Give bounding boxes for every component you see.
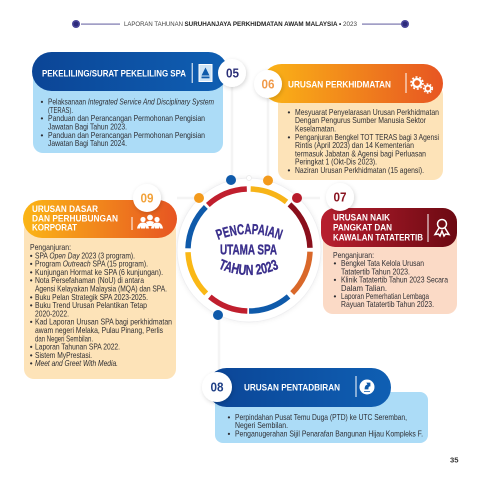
page header: [72, 20, 409, 28]
text block: 07: Bengkel Tata Kelola Urusan: [341, 259, 424, 268]
text block: 06: •: [288, 133, 290, 142]
text block: 06: Keselamatan.: [295, 124, 336, 134]
badge: 09: [133, 184, 161, 212]
icon: award ribbon: [435, 220, 449, 236]
text block: 09: •: [30, 251, 33, 260]
badge: 08: 08: [210, 380, 224, 394]
panel: 06 urusan perkhidmatan: [254, 64, 443, 180]
text block: 09: Kad Laporan Urusan SPA bagi perkhidmatan: [35, 318, 172, 327]
text block: 09: Nota Persefahaman (NoU) di antara: [35, 276, 144, 285]
page header: 2023: [343, 21, 357, 28]
badge: 05: [218, 59, 246, 87]
heading: 09: KORPORAT: [32, 222, 77, 234]
text block: 09: dan Negeri Sembilan.: [35, 334, 93, 343]
center title: UTAMA SPA: [220, 242, 277, 258]
text block: 09: Buku Trend Urusan Pelantikan Tetap: [35, 301, 147, 310]
text block: 09: •: [30, 260, 33, 269]
text block: 06: Penganjuran Bengkel TOT TERAS bagi 3 Agensi: [295, 133, 439, 142]
page number: 35: [450, 456, 458, 464]
text block: 09: Penganjuran:: [30, 243, 71, 252]
text block: 05: Jawatan Bagi Tahun 2024.: [48, 139, 127, 148]
text block: 09: •: [30, 318, 33, 327]
page header: •: [339, 21, 342, 28]
text block: 09: [30, 243, 172, 368]
panel: 05 pekeliling: [32, 52, 246, 153]
central ring: [163, 164, 335, 336]
text block: 06: Naziran Urusan Perkhidmatan (15 agensi).: [295, 166, 424, 175]
heading: 09: DAN PERHUBUNGAN: [32, 213, 118, 224]
text block: 09: awam negeri Melaka, Pulau Pinang, Perlis: [35, 326, 163, 335]
heading: 07: PANGKAT DAN: [333, 222, 392, 233]
icon: document: [199, 64, 212, 82]
text block: 08: Negeri Sembilan.: [235, 421, 288, 430]
text block: 09: •: [30, 351, 33, 360]
text block: 06: Mesyuarat Penyelarasan Urusan Perkhidmatan: [295, 108, 439, 117]
text block: 09: Sistem MyPrestasi.: [35, 351, 92, 360]
text block: 09: SPA Open Day 2023 (3 program).: [35, 251, 135, 260]
text block: 05: •: [40, 131, 44, 140]
text block: 05: •: [40, 114, 44, 123]
badge: 06: 06: [262, 76, 274, 92]
text block: 08: •: [228, 413, 230, 422]
text block: 09: 2020-2022.: [35, 309, 69, 318]
text block: 07: [333, 251, 448, 309]
text block: 06: Rintis (April 2023) dan 14 Kementerian: [295, 141, 414, 150]
center title: PENCAPAIAN: [215, 224, 284, 240]
text block: 08: [228, 413, 423, 438]
panel: 07 urusan naik pangkat: [321, 183, 457, 314]
text block: 06: [288, 108, 439, 175]
badge: 08: [202, 372, 232, 402]
text block: 07: •: [334, 276, 336, 285]
text block: 05: [40, 98, 214, 148]
text block: 07: Rayuan Tatatertib Tahun 2023.: [341, 300, 434, 309]
heading: 08: URUSAN PENTADBIRAN: [244, 382, 340, 393]
text block: 06: Peringkat 1 (Okt-Dis 2023).: [295, 158, 377, 167]
badge: 06: [254, 70, 282, 98]
icon: people: [137, 215, 163, 228]
text block: 07: Klinik Tatatertib Tahun 2023 Secara: [341, 276, 448, 285]
badge: 09: 09: [140, 190, 154, 206]
text block: 07: Dalam Talian.: [341, 284, 387, 293]
text block: 09: Program Outreach SPA (15 program).: [35, 260, 148, 269]
heading: 09: URUSAN DASAR: [32, 204, 98, 215]
text block: 08: Penganugerahan Sijil Penarafan Bangunan Hijau Kompleks F.: [235, 429, 423, 438]
text block: 09: •: [30, 359, 33, 368]
text block: 05: Panduan dan Perancangan Permohonan Pengisian: [48, 114, 205, 123]
text block: 07: Tatatertib Tahun 2023.: [341, 267, 410, 276]
text block: 07: Penganjuran:: [333, 251, 374, 260]
heading: 06: URUSAN PERKHIDMATAN: [288, 79, 391, 90]
text block: 09: •: [30, 268, 33, 277]
text block: 08: •: [228, 429, 230, 438]
text block: 06: termasuk Jabatan & Agensi bagi Perluasan: [295, 149, 426, 158]
text block: 09: •: [30, 343, 33, 352]
panel: 09 urusan dasar: [23, 184, 177, 379]
text block: 09: Laporan Tahunan SPA 2022.: [35, 343, 120, 352]
text block: 05: (TERAS).: [48, 106, 73, 115]
text block: 06: Dengan Pengurus Sumber Manusia Sektor: [295, 116, 426, 125]
icon: gears: [411, 77, 432, 93]
badge: 05: 05: [226, 66, 239, 80]
heading: 07: KAWALAN TATATERTIB: [333, 232, 423, 243]
page header: SURUHANJAYA PERKHIDMATAN AWAM MALAYSIA: [184, 21, 338, 28]
text block: 07: Laporan Pemerhatian Lembaga: [341, 292, 429, 301]
page header: LAPORAN TAHUNAN: [124, 21, 183, 28]
center title: TAHUN 2023: [220, 258, 278, 276]
text block: 09: Meet and Greet With Media.: [35, 359, 118, 368]
text block: 09: •: [30, 301, 33, 310]
text block: 09: •: [30, 293, 33, 302]
text block: 06: •: [288, 166, 290, 175]
icon: admin badge: [360, 380, 374, 394]
heading: 07: [333, 212, 423, 243]
text block: 08: Perpindahan Pusat Temu Duga (PTD) ke UTC Seremban,: [235, 413, 407, 422]
text block: 05: Pelaksanaan Integrated Service And Disciplinary System: [48, 98, 214, 106]
text block: 09: Buku Pelan Strategik SPA 2023-2025.: [35, 293, 148, 302]
panel: 08 urusan pentadbiran: [202, 368, 428, 443]
heading: 07: URUSAN NAIK: [333, 212, 390, 223]
text block: 09: •: [30, 276, 33, 285]
center title: [215, 224, 284, 276]
text block: 09: Kunjungan Hormat ke SPA (6 kunjungan).: [35, 268, 163, 277]
badge: 07: 07: [334, 190, 346, 204]
text block: 05: Jawatan Bagi Tahun 2023.: [48, 122, 127, 132]
text block: 06: •: [288, 108, 290, 117]
text block: 07: •: [334, 259, 336, 268]
text block: 09: Agensi Kelayakan Malaysia (MQA) dan SPA.: [35, 284, 167, 294]
text block: 05: Panduan dan Perancangan Permohonan Pengisian: [48, 131, 205, 140]
heading: 05: PEKELILING/SURAT PEKELILING SPA: [42, 68, 186, 79]
text block: 05: •: [40, 98, 44, 106]
text block: 07: •: [334, 292, 336, 301]
heading: 09: [32, 204, 118, 234]
